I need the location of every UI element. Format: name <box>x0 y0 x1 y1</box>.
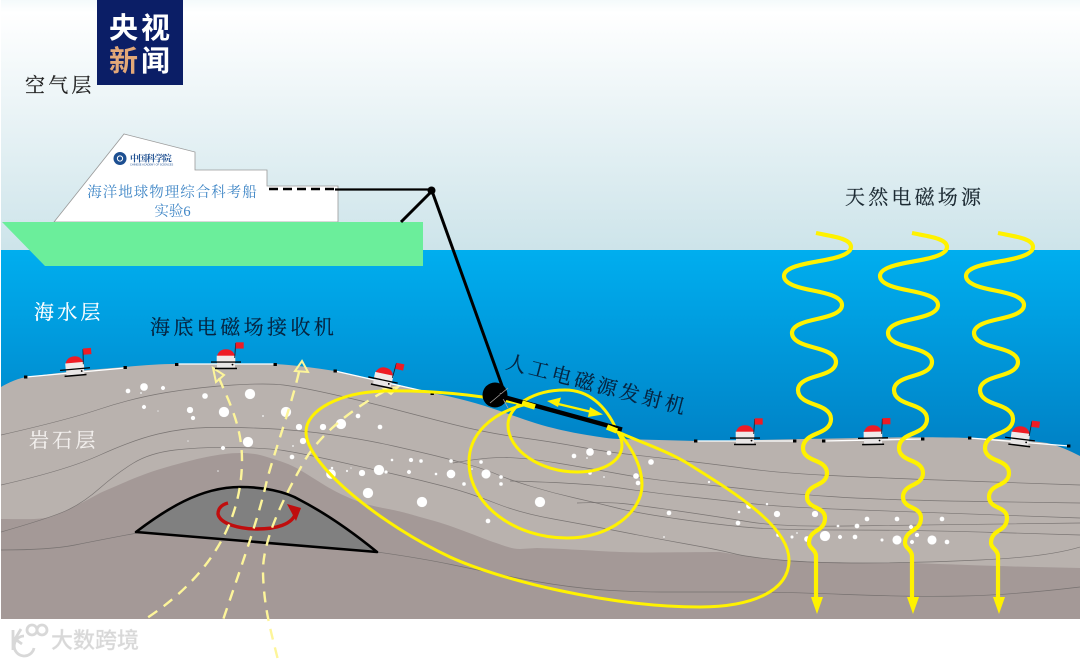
tow crane and cable <box>269 186 505 394</box>
dashed induced field arrows <box>147 361 398 660</box>
double arrow <box>547 398 603 417</box>
CCTV news logo <box>97 0 183 85</box>
receiver 1 <box>58 348 93 377</box>
research ship <box>2 134 423 266</box>
sky: air layer <box>1 0 1080 250</box>
label: natural source: 天然电磁场源 <box>845 186 984 209</box>
seabed: lower dark rock layer <box>1 453 1080 619</box>
seabed receiver cables <box>24 363 1070 448</box>
sea: water layer <box>1 250 1080 457</box>
seabed: upper light rock layer <box>1 364 1080 619</box>
ship hull <box>2 222 423 266</box>
receiver 5 <box>858 418 891 445</box>
rock strata lines <box>1 384 1080 596</box>
CAS logo: 中国科学院 <box>130 152 172 164</box>
CAS logo <box>114 152 173 166</box>
receiver 3 <box>367 358 404 391</box>
watermark: 大数跨境 <box>51 628 139 653</box>
natural field wave 1 <box>784 233 851 614</box>
artificial source transmitter <box>482 382 622 431</box>
ship name <box>87 183 258 220</box>
natural field wave 2 <box>880 233 947 614</box>
yellow artificial field loops <box>306 390 789 607</box>
label: rock layer: 岩石层 <box>29 429 99 452</box>
ship name: 海洋地球物理综合科考船 <box>87 183 258 201</box>
CCTV news logo: 视 <box>141 12 170 45</box>
receiver 2 <box>211 342 244 369</box>
watermark <box>13 625 139 656</box>
label: air layer: 空气层 <box>25 74 95 97</box>
CCTV news logo: 新 <box>109 45 138 78</box>
CAS logo: CHINESE ACADEMY OF SCIENCES <box>130 162 173 166</box>
natural field wave 3 <box>966 233 1033 614</box>
ship superstructure <box>54 134 338 222</box>
label: artificial source transmitter: 人工电磁源发射机 <box>504 351 691 420</box>
label: sea water layer: 海水层 <box>34 301 104 324</box>
label: seabed receivers: 海底电磁场接收机 <box>150 316 337 339</box>
receiver 4 <box>730 418 763 445</box>
CCTV news logo: 闻 <box>141 45 170 78</box>
grey high-resistivity anomaly body <box>136 487 377 552</box>
receiver 6 <box>1004 418 1040 448</box>
red induced current loop arrow <box>218 503 301 529</box>
CCTV news logo: 央 <box>109 12 138 45</box>
ship name: 实验6 <box>154 203 191 220</box>
white gas bubbles <box>126 383 950 545</box>
